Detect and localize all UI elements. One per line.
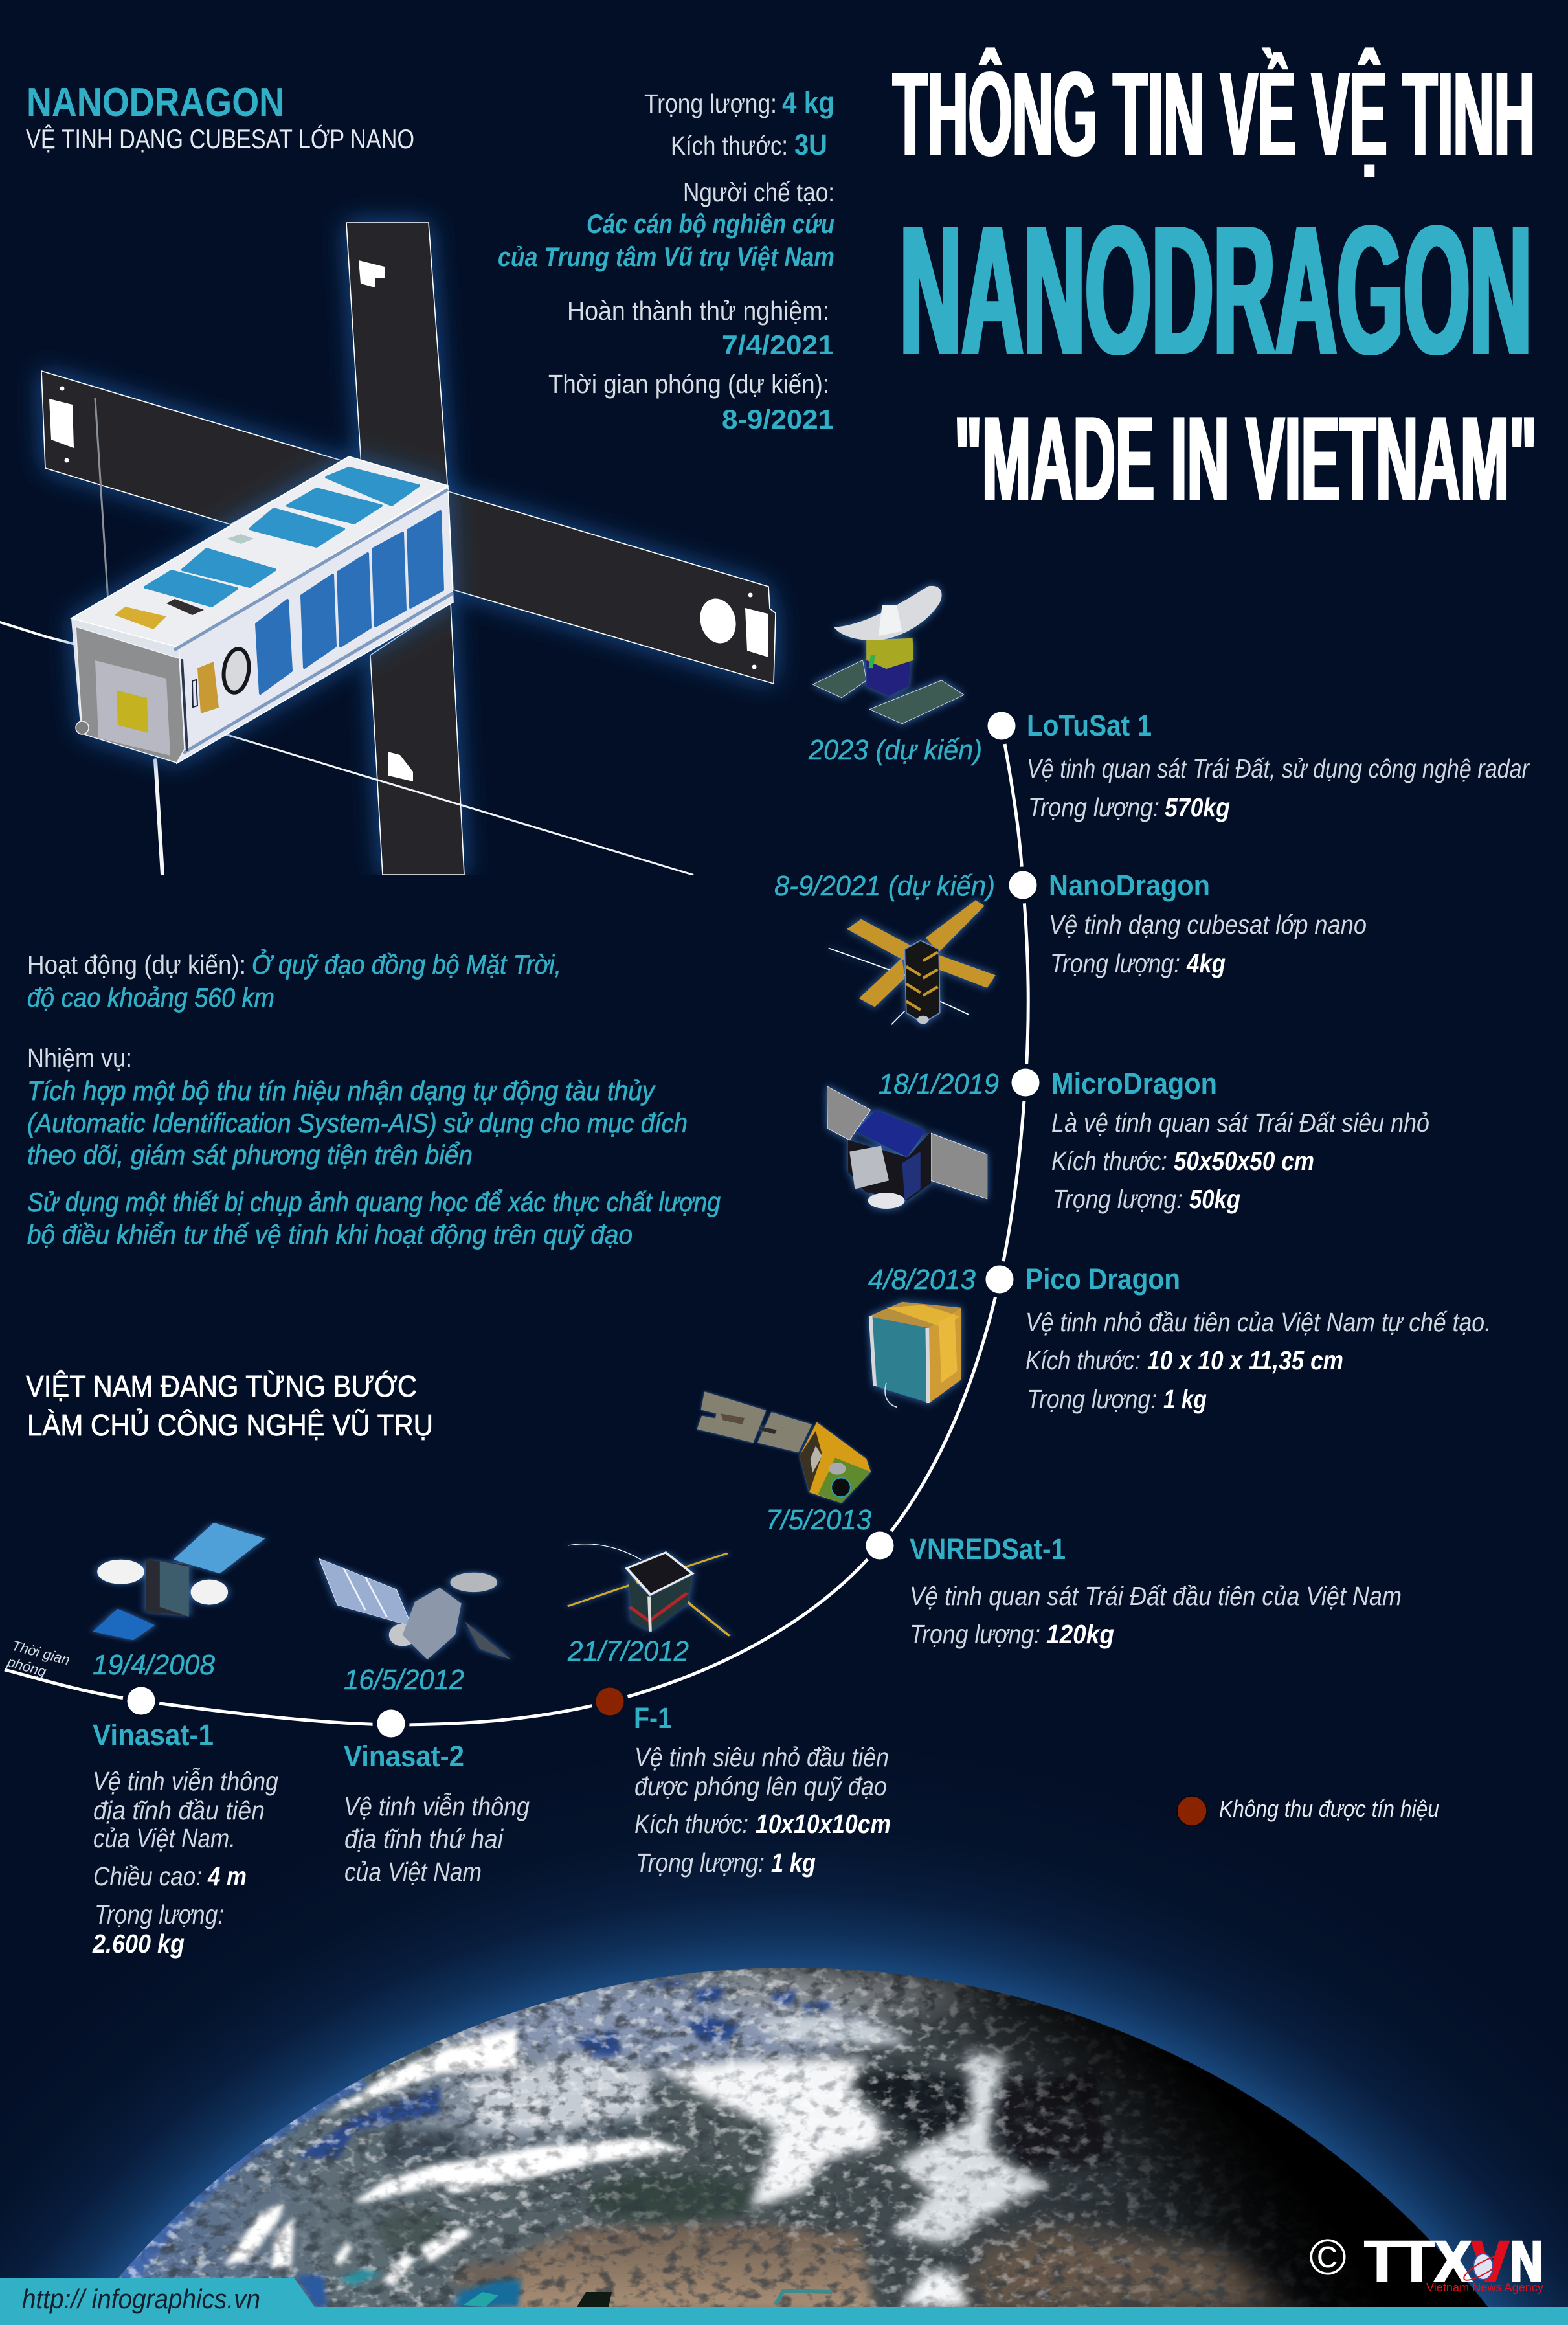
entry: Vinasat-1: 4 m bbox=[207, 1861, 247, 1891]
limb blue band bbox=[126, 2078, 363, 2282]
spec list: Kích thước: bbox=[671, 131, 788, 161]
entry: Vinasat-1: Trọng lượng: bbox=[95, 1900, 224, 1929]
entry: Vinasat-1: Chiều cao: bbox=[93, 1861, 202, 1891]
entry: NanoDragon: Trọng lượng: bbox=[1050, 949, 1180, 978]
icon: Vinasat-2 satellite bbox=[319, 1558, 511, 1659]
spec list: 3U bbox=[794, 128, 827, 161]
entry: LoTuSat 1: 2023 (dự kiến) bbox=[808, 734, 982, 766]
cloud masses bbox=[660, 2016, 1048, 2307]
entry: Vinasat-1 bbox=[92, 1523, 278, 1959]
spec list: 7/4/2021 bbox=[722, 330, 834, 360]
header left: NanoDragon label: NANODRAGON bbox=[27, 80, 284, 125]
spec list: Các cán bộ nghiên cứu bbox=[587, 208, 834, 239]
entry: LoTuSat 1: LoTuSat 1 bbox=[1027, 709, 1152, 742]
title bbox=[893, 47, 1537, 526]
top face bbox=[71, 456, 448, 647]
spec list: 8-9/2021 bbox=[722, 404, 834, 434]
launch time label: Thời gian bbox=[10, 1637, 72, 1668]
entry: MicroDragon: 18/1/2019 bbox=[879, 1068, 999, 1100]
entry: Pico Dragon: Kích thước: bbox=[1025, 1345, 1141, 1375]
icon: MicroDragon satellite bbox=[827, 1086, 987, 1209]
entry: VNREDSat-1: VNREDSat-1 bbox=[910, 1533, 1066, 1566]
entry: MicroDragon: Là vệ tinh quan sát Trái Đất siêu nhỏ bbox=[1051, 1108, 1429, 1138]
logo: TTXVN: N bbox=[1510, 2229, 1543, 2295]
mission description: bộ điều khiển tư thế vệ tinh khi hoạt động trên quỹ đạo bbox=[27, 1219, 633, 1250]
dark terminator bbox=[0, 1942, 1568, 2325]
entry: MicroDragon bbox=[827, 1067, 1429, 1214]
icon: F-1 satellite bbox=[568, 1544, 730, 1636]
mottled bright zone bbox=[466, 2056, 654, 2130]
entry: LoTuSat 1: 570kg bbox=[1165, 792, 1230, 822]
entry: F-1: 1 kg bbox=[771, 1848, 816, 1878]
entry: Vinasat-2: địa tĩnh thứ hai bbox=[344, 1824, 504, 1854]
icon: Vinasat-1 satellite bbox=[93, 1523, 265, 1640]
spec list: của Trung tâm Vũ trụ Việt Nam bbox=[498, 241, 834, 272]
side blue cells bbox=[256, 511, 443, 693]
solar panel: right bbox=[448, 491, 776, 684]
globe surface bbox=[118, 1968, 1488, 2307]
entry: MicroDragon: MicroDragon bbox=[1051, 1067, 1217, 1100]
launch time label bbox=[5, 1637, 72, 1680]
front plate bbox=[95, 660, 170, 756]
entry: Pico Dragon: Vệ tinh nhỏ đầu tiên của Việt Nam tự chế tạo. bbox=[1025, 1307, 1491, 1337]
entry: Vinasat-1: của Việt Nam. bbox=[93, 1823, 236, 1853]
entry: F-1: Trọng lượng: bbox=[636, 1848, 765, 1878]
logo: TTXVN: V bbox=[1472, 2229, 1509, 2295]
entry: Vinasat-1: 2.600 kg bbox=[92, 1929, 185, 1959]
entry: VNREDSat-1: 120kg bbox=[1046, 1619, 1114, 1649]
mission description: theo dõi, giám sát phương tiện trên biển bbox=[27, 1140, 473, 1170]
spec list: Thời gian phóng (dự kiến): bbox=[548, 369, 829, 399]
spec list: 4 kg bbox=[782, 86, 834, 119]
mission description bbox=[27, 948, 721, 1250]
mission description: Hoạt động (dự kiến): bbox=[27, 950, 246, 980]
entry: Vinasat-1: 19/4/2008 bbox=[93, 1649, 216, 1681]
entry: Pico Dragon bbox=[868, 1263, 1491, 1414]
ocean gaps between clouds bbox=[296, 1980, 835, 2158]
entry: Vinasat-1: Vinasat-1 bbox=[93, 1718, 214, 1751]
panel cut-outs bbox=[49, 260, 768, 781]
entry: MicroDragon: Kích thước: bbox=[1051, 1146, 1167, 1176]
earth bbox=[0, 1840, 1568, 2307]
entry: Vinasat-1: Vệ tinh viễn thông bbox=[93, 1766, 278, 1796]
mission description: Tích hợp một bộ thu tín hiệu nhận dạng tự động tàu thủy bbox=[27, 1075, 656, 1106]
entry: F-1: F-1 bbox=[634, 1702, 672, 1735]
entry: NanoDragon: 4kg bbox=[1186, 949, 1226, 978]
entry: F-1: được phóng lên quỹ đạo bbox=[634, 1771, 887, 1801]
entry: Vinasat-2: Vệ tinh viễn thông bbox=[344, 1791, 530, 1821]
land bbox=[495, 2224, 874, 2311]
satellite body bbox=[71, 456, 453, 763]
legend bbox=[1177, 1795, 1439, 1826]
entry: F-1: Vệ tinh siêu nhỏ đầu tiên bbox=[634, 1742, 889, 1772]
entry: Pico Dragon: 4/8/2013 bbox=[868, 1264, 976, 1296]
main satellite illustration bbox=[0, 223, 776, 875]
entry: Vinasat-2: của Việt Nam bbox=[344, 1857, 482, 1887]
spec list bbox=[498, 86, 834, 434]
coast water bbox=[453, 2280, 521, 2307]
entry: VNREDSat-1 bbox=[697, 1391, 1402, 1649]
logo: TTXVN bbox=[1309, 2229, 1543, 2295]
entry: NanoDragon: 8-9/2021 (dự kiến) bbox=[774, 870, 995, 902]
solar panel: bottom bbox=[370, 602, 464, 875]
logo: TTXVN: Vietnam News Agency bbox=[1426, 2281, 1543, 2294]
spec list: Hoàn thành thử nghiệm: bbox=[567, 296, 829, 326]
antennas bbox=[0, 399, 693, 875]
footer band bbox=[0, 2278, 1568, 2325]
section heading: VIỆT NAM ĐANG TỪNG BƯỚC bbox=[26, 1369, 417, 1403]
icon: NanoDragon satellite bbox=[829, 900, 996, 1024]
legend: Không thu được tín hiệu bbox=[1219, 1795, 1439, 1822]
timeline nodes bbox=[125, 710, 1042, 1740]
timeline curve bbox=[5, 726, 1028, 1725]
entry: LoTuSat 1: Trọng lượng: bbox=[1028, 792, 1159, 822]
dark port bbox=[166, 599, 204, 615]
icon: LoTuSat satellite bbox=[812, 586, 964, 724]
header left: NanoDragon label bbox=[26, 80, 414, 154]
entry: LoTuSat 1 bbox=[808, 586, 1530, 822]
side face bbox=[177, 487, 453, 763]
header left: NanoDragon label: VỆ TINH DẠNG CUBESAT LỚP NANO bbox=[26, 124, 414, 154]
gold connector on top bbox=[115, 607, 166, 629]
solar panel: top bbox=[346, 223, 448, 492]
logo: TTXVN: TTX bbox=[1365, 2229, 1472, 2295]
mission description: Ở quỹ đạo đồng bộ Mặt Trời, bbox=[252, 948, 561, 980]
icon: VNREDSat satellite bbox=[697, 1391, 871, 1503]
footer band: http:// infographics.vn bbox=[22, 2284, 260, 2314]
yellow square bbox=[117, 690, 148, 733]
spec list: Người chế tạo: bbox=[683, 177, 834, 207]
section heading bbox=[26, 1369, 433, 1442]
entry: Pico Dragon: 1 kg bbox=[1163, 1384, 1207, 1414]
mission description: (Automatic Identification System-AIS) sử dụng cho mục đích bbox=[27, 1108, 688, 1138]
entry: Vinasat-2: Vinasat-2 bbox=[344, 1740, 464, 1773]
entry: F-1: 10x10x10cm bbox=[756, 1809, 891, 1839]
front face bbox=[76, 627, 185, 763]
entry: VNREDSat-1: 7/5/2013 bbox=[766, 1504, 871, 1536]
side latch bbox=[192, 680, 197, 707]
entry: Pico Dragon: Pico Dragon bbox=[1025, 1263, 1180, 1296]
entry: MicroDragon: Trọng lượng: bbox=[1053, 1184, 1183, 1214]
small top sensor bbox=[227, 534, 254, 544]
mission description: Nhiệm vụ: bbox=[27, 1043, 132, 1073]
mission description: độ cao khoảng 560 km bbox=[27, 982, 274, 1013]
entry: MicroDragon: 50x50x50 cm bbox=[1174, 1146, 1314, 1176]
logo: TTXVN: © bbox=[1309, 2229, 1347, 2286]
launch time label: phóng bbox=[5, 1653, 49, 1680]
spec list: Trọng lượng: bbox=[644, 89, 777, 118]
solar panel: left bbox=[41, 371, 343, 524]
entry: Vinasat-2: 16/5/2012 bbox=[344, 1664, 464, 1696]
entry: VNREDSat-1: Vệ tinh quan sát Trái Đất đầu tiên của Việt Nam bbox=[910, 1581, 1402, 1611]
mission description: Sử dụng một thiết bị chụp ảnh quang học để xác thực chất lượng bbox=[27, 1187, 721, 1217]
side ring aperture bbox=[221, 647, 252, 694]
entry: F-1: 21/7/2012 bbox=[567, 1635, 689, 1667]
entry: Vinasat-1: địa tĩnh đầu tiên bbox=[93, 1795, 265, 1825]
entry: NanoDragon: Vệ tinh dạng cubesat lớp nano bbox=[1049, 910, 1367, 939]
entry: Pico Dragon: Trọng lượng: bbox=[1027, 1384, 1157, 1414]
texture bbox=[118, 1968, 1254, 2307]
section heading: LÀM CHỦ CÔNG NGHỆ VŨ TRỤ bbox=[27, 1408, 433, 1442]
entry: F-1: Kích thước: bbox=[634, 1809, 748, 1839]
entry: MicroDragon: 50kg bbox=[1189, 1184, 1240, 1214]
top blue cells bbox=[145, 468, 419, 606]
entry: NanoDragon: NanoDragon bbox=[1049, 869, 1210, 902]
side gold bracket bbox=[197, 662, 219, 713]
atmosphere glow bbox=[0, 1742, 1568, 2325]
entry: F-1 bbox=[567, 1544, 891, 1878]
icon: Pico Dragon satellite bbox=[869, 1302, 961, 1407]
entry: Vinasat-2 bbox=[319, 1558, 530, 1887]
entry: NanoDragon bbox=[774, 869, 1367, 1024]
entry: VNREDSat-1: Trọng lượng: bbox=[910, 1619, 1040, 1649]
entry: Pico Dragon: 10 x 10 x 11,35 cm bbox=[1147, 1345, 1343, 1375]
